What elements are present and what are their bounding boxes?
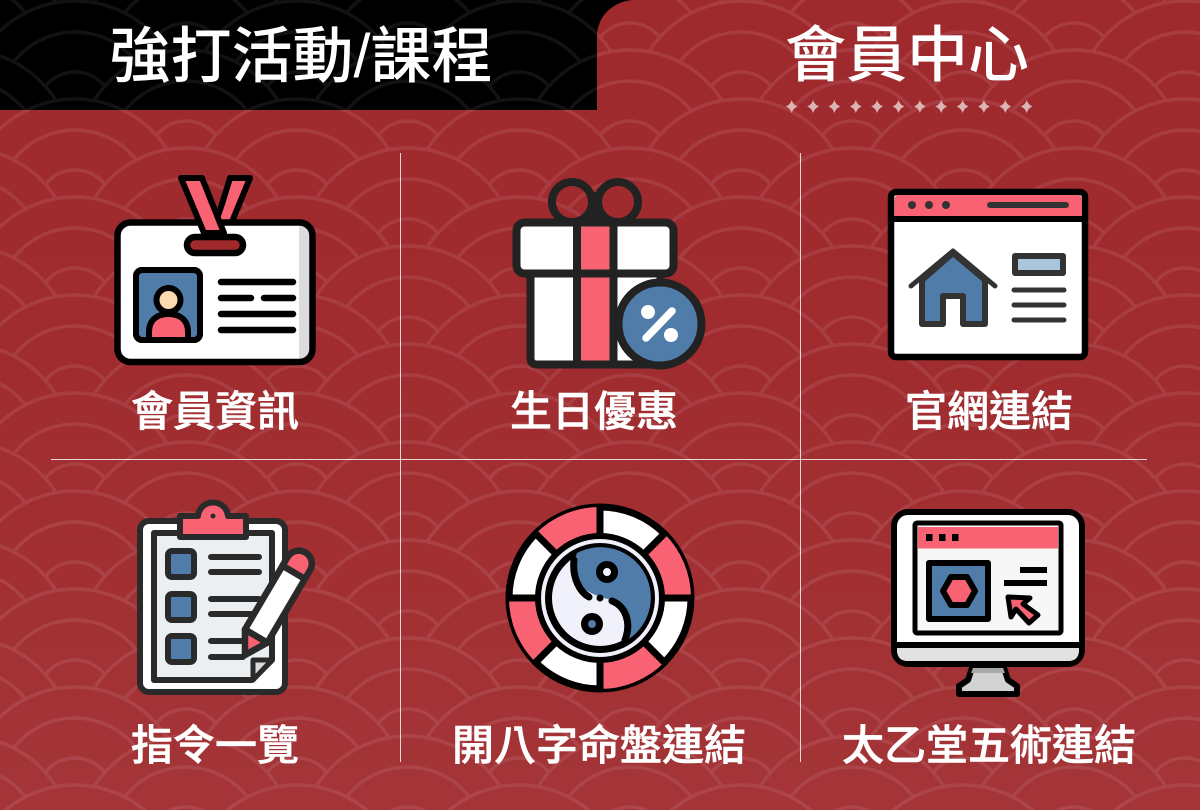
inactive tab: black header bbox=[0, 0, 635, 110]
label: 生日優惠: 生日優惠 bbox=[510, 388, 678, 435]
label: 官網連結: 官網連結 bbox=[905, 388, 1073, 435]
label: 會員資訊: 會員資訊 bbox=[131, 388, 299, 435]
icon: member ID badge bbox=[118, 178, 312, 362]
heading: 強打活動/課程: 強打活動/課程 bbox=[110, 22, 492, 90]
icon: birthday gift with percent badge bbox=[516, 182, 702, 366]
icon: website browser window bbox=[891, 192, 1085, 357]
icon: computer monitor with cursor bbox=[892, 512, 1084, 694]
icon: clipboard command list with pencil bbox=[140, 502, 317, 692]
label: 指令一覽: 指令一覽 bbox=[131, 722, 299, 769]
label: 開八字命盤連結: 開八字命盤連結 bbox=[452, 722, 746, 769]
icon: yin-yang bagua wheel bbox=[509, 507, 691, 689]
label: 太乙堂五術連結: 太乙堂五術連結 bbox=[842, 722, 1136, 769]
star divider under heading bbox=[786, 100, 1033, 113]
heading: 會員中心: 會員中心 bbox=[785, 21, 1029, 89]
